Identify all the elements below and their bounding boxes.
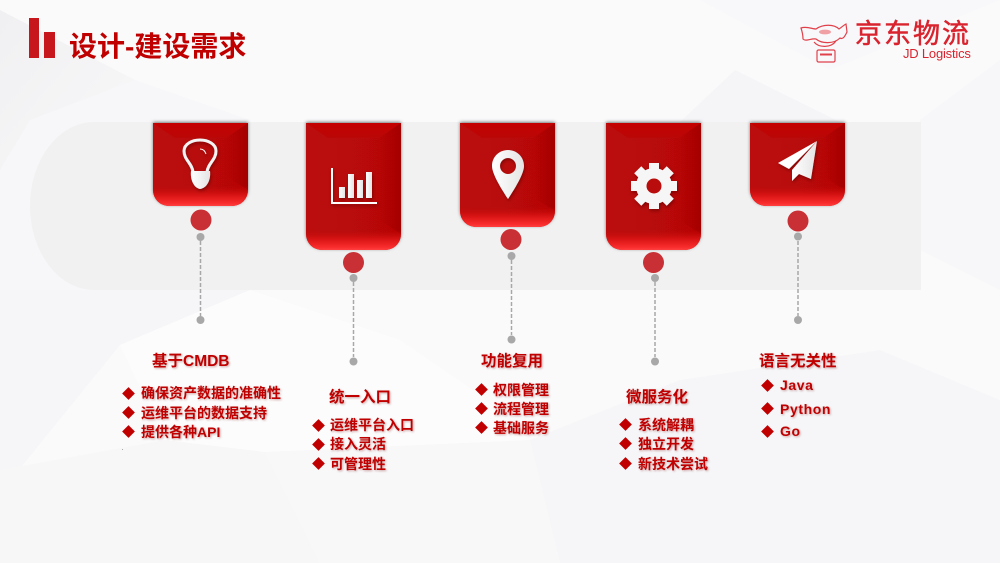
connector 5 xyxy=(788,210,808,324)
text block: 统一入口: 接入灵活 xyxy=(330,436,386,452)
icon: gear xyxy=(631,163,677,209)
logo: JD Logistics xyxy=(800,19,971,63)
text block: 语言无关性: 语言无关性 xyxy=(759,353,837,370)
text block: 统一入口: 统一入口 xyxy=(329,389,391,406)
text block: 语言无关性: Python xyxy=(780,401,831,417)
text block: 统一入口 xyxy=(312,388,415,472)
connector 2 xyxy=(343,252,364,366)
text block: 微服务化: 独立开发 xyxy=(638,436,694,452)
connector 3 xyxy=(500,229,522,344)
text block: 统一入口: 运维平台入口 xyxy=(330,417,414,433)
text block: 语言无关性: Go xyxy=(780,423,801,439)
icon: dog mascot xyxy=(801,24,847,62)
text block: 微服务化: 微服务化 xyxy=(626,389,688,406)
text block: 统一入口: 可管理性 xyxy=(330,456,386,472)
text block: 功能复用: 权限管理 xyxy=(493,382,549,398)
text block: 功能复用: 流程管理 xyxy=(493,401,549,417)
card 5: paper plane xyxy=(750,123,845,206)
title marker xyxy=(29,18,55,58)
text block: 微服务化: 新技术尝试 xyxy=(638,456,708,472)
text block: 基于CMDB: 基于CMDB xyxy=(152,353,230,370)
text block: 功能复用: 功能复用 xyxy=(481,353,543,370)
text block: 功能复用: 基础服务 xyxy=(493,420,549,436)
icon: map pin xyxy=(492,150,524,199)
title: 设计-建设需求 xyxy=(69,31,246,62)
logo: JD Logistics: 京东物流 xyxy=(855,19,971,49)
text block: 语言无关性: Java xyxy=(780,377,814,393)
text block: 基于CMDB: 运维平台的数据支持 xyxy=(141,405,267,421)
connector 4 xyxy=(643,252,664,366)
icon: bar chart xyxy=(331,168,377,204)
grey band xyxy=(30,122,921,290)
connector 1 xyxy=(190,210,212,324)
text block: 语言无关性 xyxy=(759,352,838,439)
text block: 基于CMDB: 提供各种API xyxy=(141,424,220,440)
card 2: chart xyxy=(306,123,401,250)
icon: light bulb xyxy=(184,140,216,189)
text block: 基于CMDB: 确保资产数据的准确性 xyxy=(141,385,281,401)
card 1: bulb xyxy=(153,123,248,206)
icon: paper plane xyxy=(778,141,817,181)
card 3: location pin xyxy=(460,123,555,227)
text block: 功能复用 xyxy=(475,352,550,436)
text block: 微服务化 xyxy=(619,388,710,472)
text block: 基于CMDB xyxy=(122,352,282,450)
text block: 微服务化: 系统解耦 xyxy=(638,417,694,433)
logo: JD Logistics: JD Logistics xyxy=(903,46,971,61)
card 4: gear xyxy=(606,123,701,250)
